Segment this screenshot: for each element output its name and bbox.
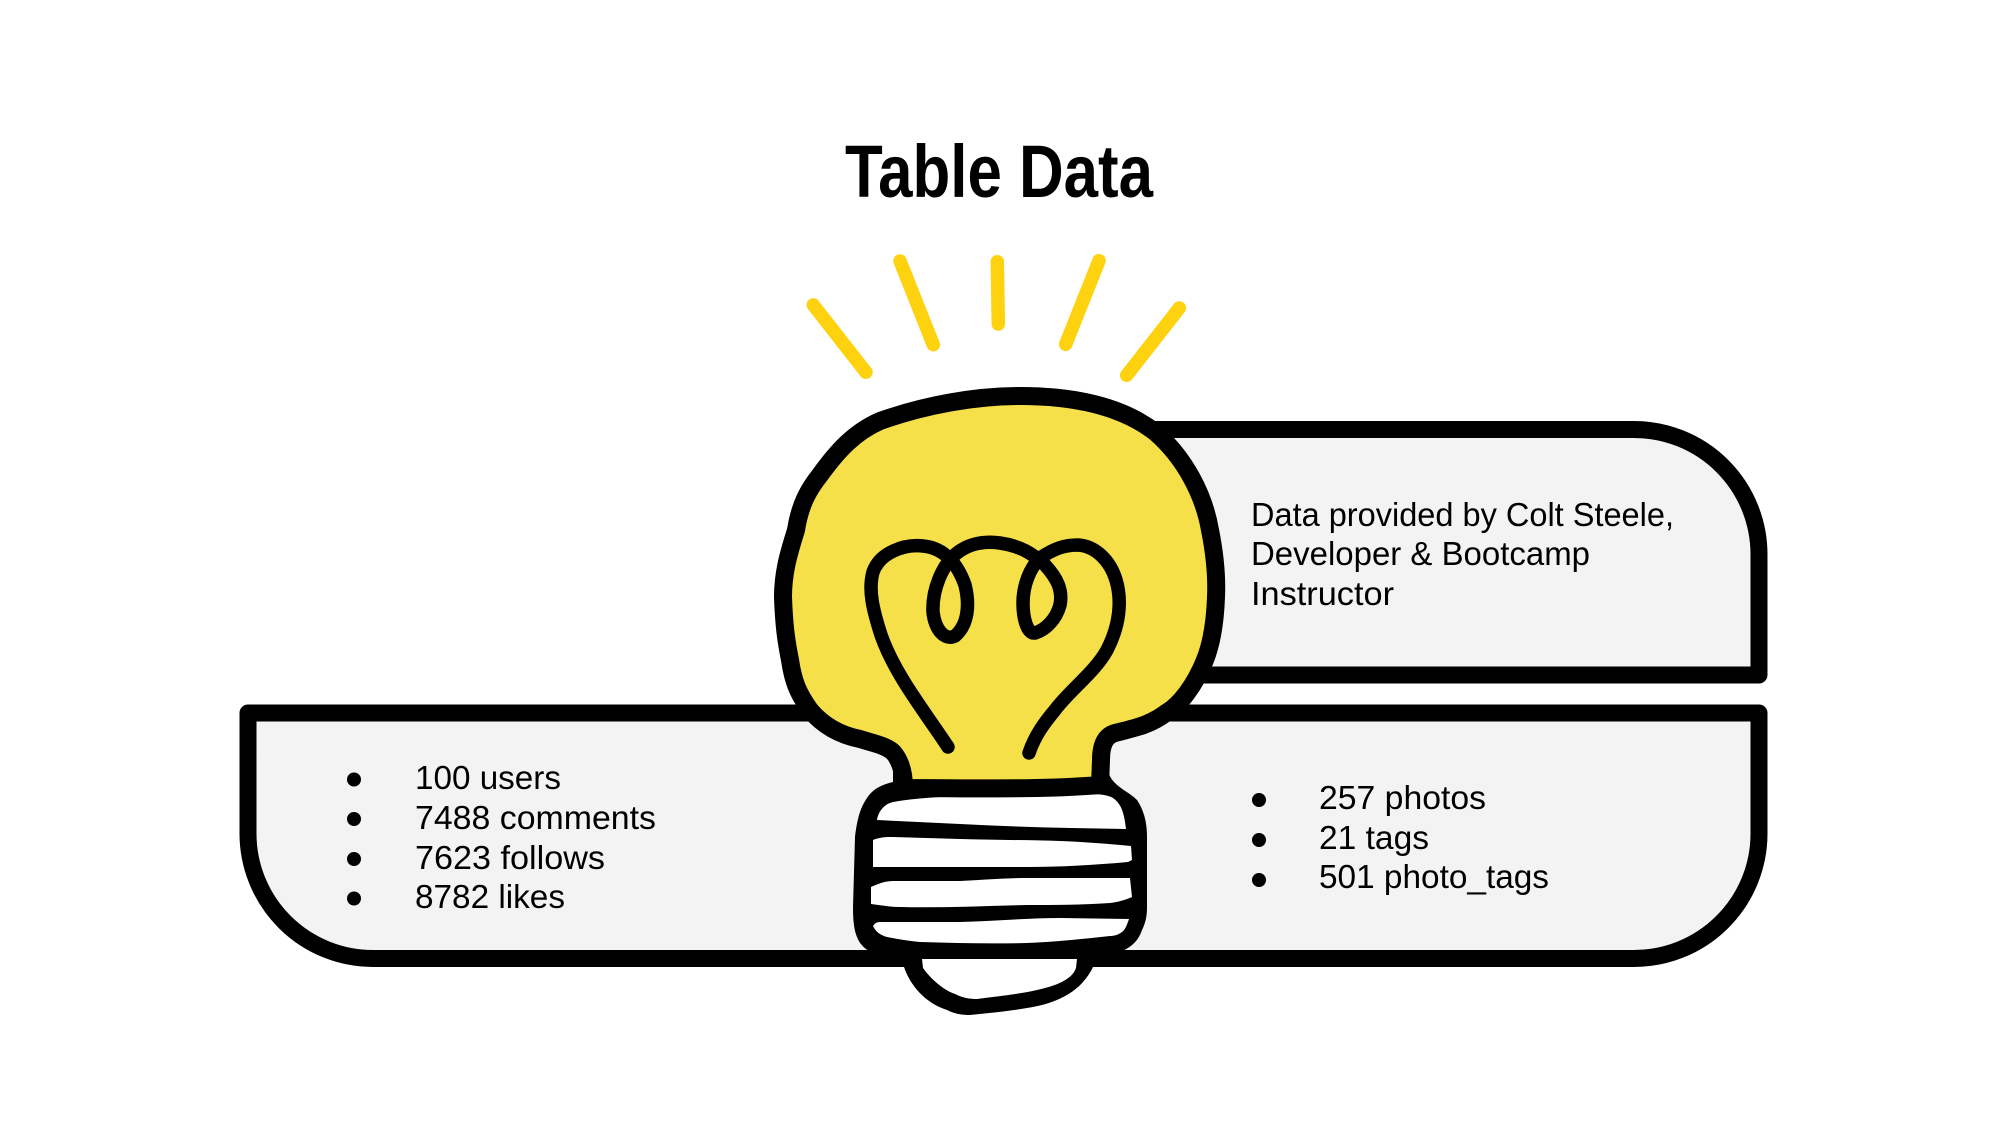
list: users, comments, follows, likes: [347, 759, 656, 915]
list: photos, tags, photo_tags: 21 tags: [1319, 819, 1429, 856]
panel: data source: [1000, 430, 1759, 675]
icon: light bulb: [783, 396, 1216, 1015]
panel shape: data source: [1000, 430, 1759, 675]
text block: data source credit: Instructor: [1251, 575, 1394, 612]
list: users, comments, follows, likes: 100 users: [415, 759, 561, 796]
title: Table Data: [845, 130, 1154, 213]
bulb glass: [783, 396, 1216, 788]
text block: data source credit: [1251, 496, 1674, 612]
bulb screw base cap: [904, 955, 1095, 1015]
list: photos, tags, photo_tags: [1252, 779, 1549, 895]
icon: light rays: [813, 261, 1179, 375]
list: users, comments, follows, likes: 8782 likes: [415, 878, 565, 915]
panel shape: table counts: [248, 713, 1759, 958]
list: users, comments, follows, likes: 7488 comments: [415, 799, 656, 836]
text block: data source credit: Data provided by Colt Steele,: [1251, 496, 1674, 533]
panel: table counts: [248, 713, 1759, 958]
list: photos, tags, photo_tags: 257 photos: [1319, 779, 1486, 816]
bulb filament: [871, 542, 1119, 753]
list: photos, tags, photo_tags: 501 photo_tags: [1319, 858, 1549, 895]
list: users, comments, follows, likes: 7623 follows: [415, 839, 605, 876]
bulb screw base: [853, 768, 1147, 953]
text block: data source credit: Developer & Bootcamp: [1251, 535, 1590, 572]
